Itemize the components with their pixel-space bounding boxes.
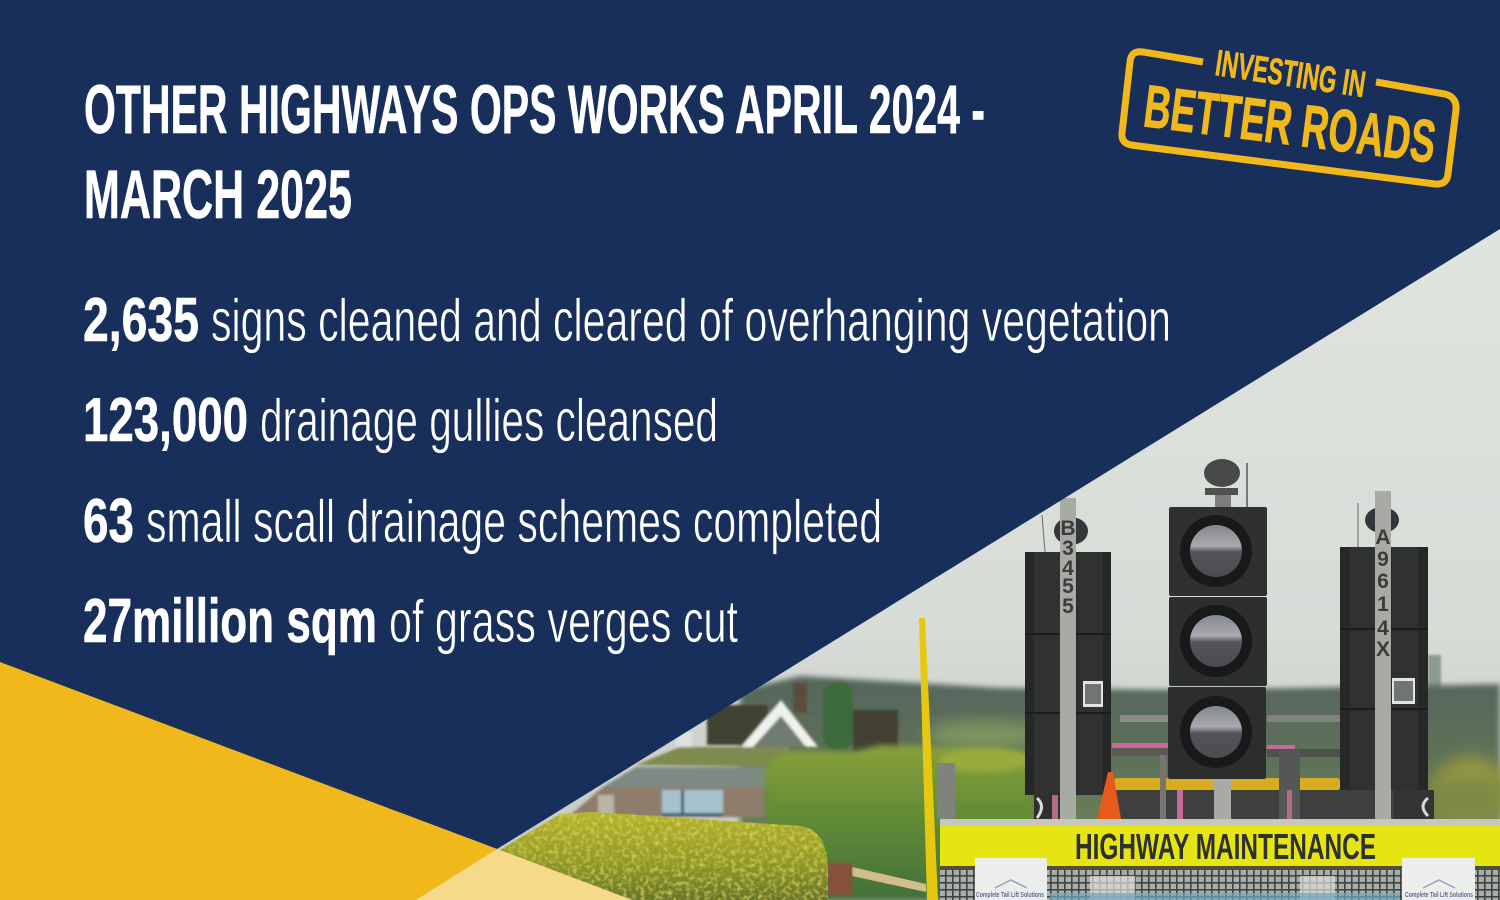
- pole label A9614X: 4: [1377, 617, 1389, 640]
- stat: drainage gullies: drainage gullies cleansed: [260, 387, 718, 454]
- stamp logo: investing in better roads: INVESTING IN: [1213, 42, 1368, 105]
- photo: trailer frame rails: [1112, 715, 1434, 820]
- QR code: [1083, 681, 1103, 707]
- white notice plates: [975, 858, 1047, 900]
- pole label A9614X: A: [1375, 526, 1391, 549]
- pole label A9614X: 9: [1377, 548, 1389, 571]
- pole label A9614X: 6: [1377, 570, 1389, 593]
- yellow pole: [919, 618, 938, 900]
- pole label B3455: 4: [1062, 557, 1074, 580]
- right sign stack with pole: [1340, 491, 1428, 821]
- pole label A9614X: 1: [1377, 593, 1389, 616]
- title: MARCH 2025: [84, 156, 352, 233]
- pole label B3455: 5: [1062, 595, 1074, 618]
- stat: signs cleaned: [83, 286, 1171, 355]
- QR code: [1392, 678, 1415, 704]
- photo: trimmed yellow-green hedge: [500, 812, 828, 900]
- metal bracket: [937, 763, 955, 819]
- stat: drainage gullies: 123,000: [83, 386, 248, 455]
- title: [84, 71, 985, 233]
- photo: temporary traffic signals and highway maintenance trailer: [400, 220, 1500, 900]
- yellow corner triangle: [0, 662, 497, 900]
- pole label B3455: B: [1060, 517, 1076, 540]
- stat: signs cleaned: 2,635: [83, 286, 199, 355]
- pole label A9614X: X: [1376, 638, 1390, 661]
- photo: blurred house: [568, 682, 898, 817]
- stat: drainage schemes: 63: [83, 487, 134, 556]
- pale yellow corner triangle: [416, 849, 632, 900]
- highway maintenance sign with mesh: [940, 819, 1500, 900]
- stat: drainage gullies: [83, 386, 718, 455]
- stat: grass verges: of grass verges cut: [389, 588, 738, 655]
- icon: orange traffic cone: [1097, 772, 1121, 819]
- highway maintenance sign with mesh: Complete Tail Lift Solutions: [976, 892, 1044, 899]
- centre traffic signal head: [1168, 459, 1267, 820]
- stat: drainage schemes: [83, 487, 882, 556]
- pole label B3455: 5: [1062, 575, 1074, 598]
- stat: grass verges: [83, 587, 738, 656]
- pole label B3455: 3: [1062, 537, 1074, 560]
- photo: green bush: [764, 745, 1040, 900]
- stat: grass verges: 27million sqm: [83, 587, 377, 656]
- photo background: blurred hills and trees: [740, 655, 1500, 900]
- stat: drainage schemes: small scall drainage schemes completed: [146, 488, 882, 555]
- stamp logo: investing in better roads: [1122, 42, 1456, 184]
- left sign stack with pole: [1025, 498, 1111, 822]
- highway maintenance sign with mesh: Complete Tail Lift Solutions: [1405, 892, 1473, 899]
- photo: fence and brown post: [828, 863, 926, 895]
